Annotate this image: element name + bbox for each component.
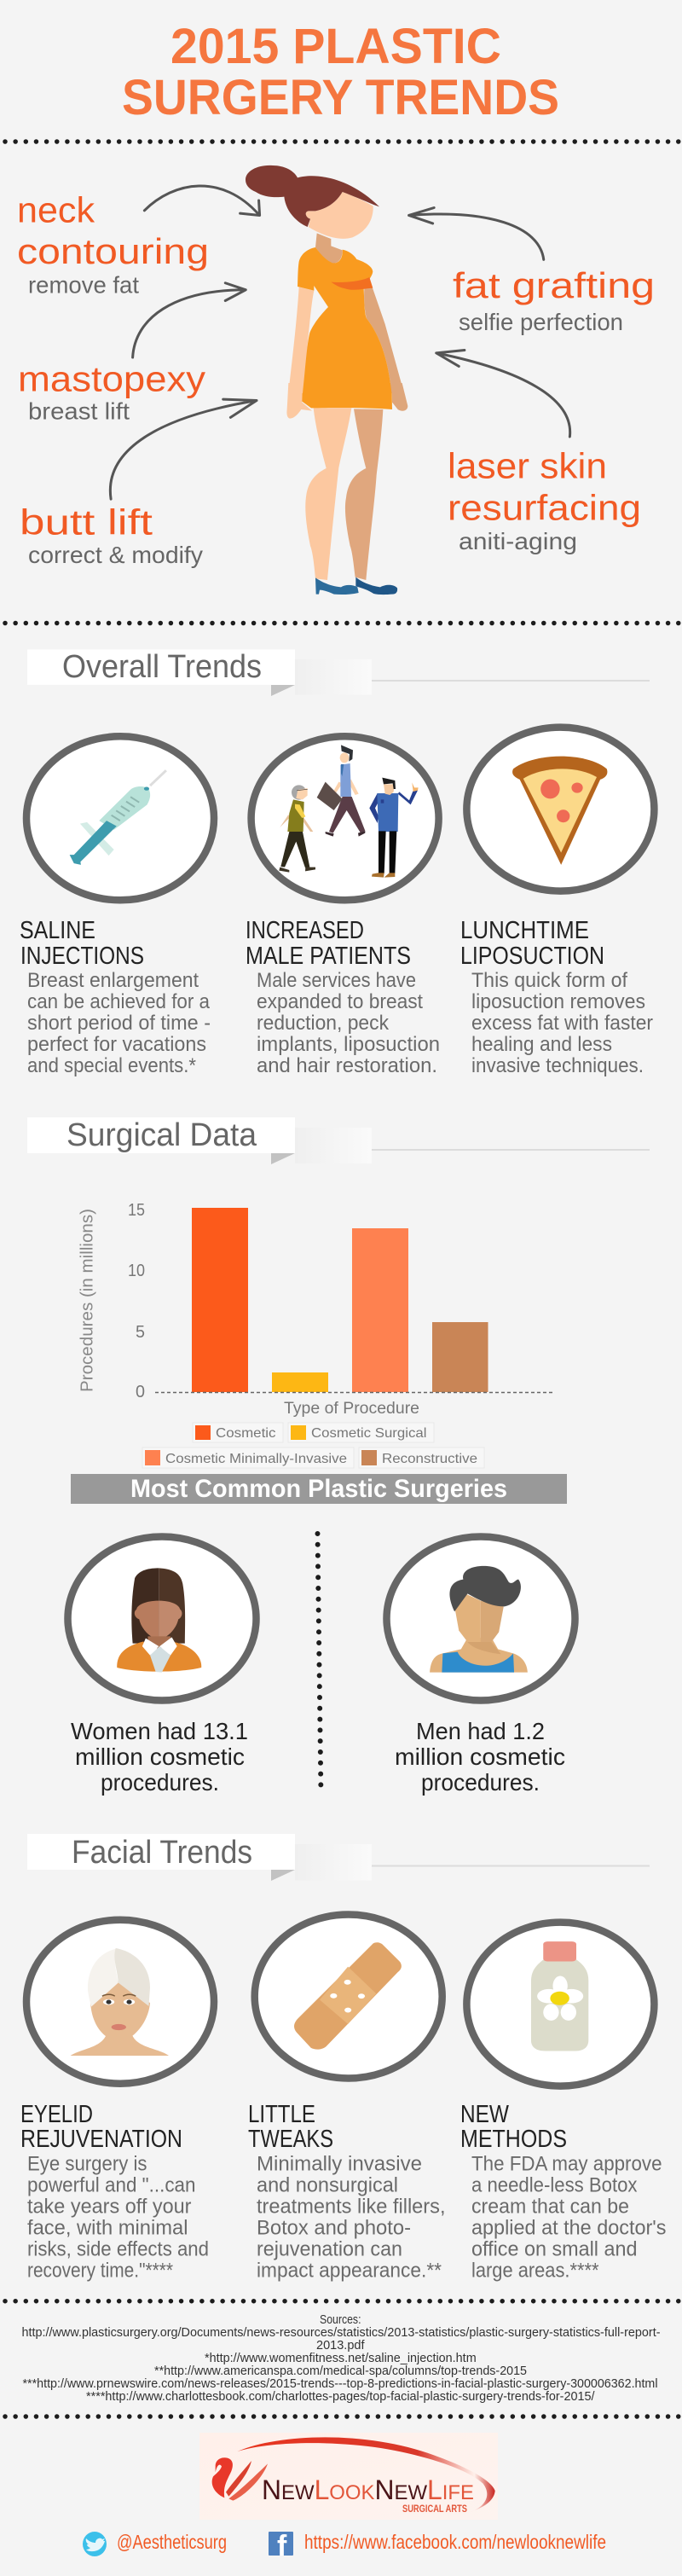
text: new methods description	[471, 2153, 667, 2283]
heading: eyelid rejuvenation: EYELID	[20, 2101, 93, 2128]
legend: Cosmetic Minimally-Invasive	[165, 1452, 347, 1466]
text: sources: 2013.pdf	[316, 2338, 365, 2353]
panel: saline injections	[20, 736, 214, 1077]
text: little tweaks description: impact appearance.**	[257, 2259, 442, 2283]
icon: woman portrait	[68, 1537, 256, 1701]
text: men statistic: procedures.	[421, 1769, 540, 1796]
text: little tweaks description	[257, 2153, 445, 2283]
y axis ticks: 5	[136, 1323, 145, 1342]
banner: most common plastic surgeries: Most Common Plastic Surgeries	[130, 1475, 507, 1503]
text: women statistic: procedures.	[101, 1769, 219, 1796]
label: laser skin resurfacing	[448, 446, 641, 554]
title: SURGERY TRENDS	[122, 70, 559, 125]
panel: men statistic	[387, 1537, 575, 1796]
panel: increased male patients	[246, 736, 440, 1077]
panel: new methods	[460, 1923, 667, 2283]
logo: New Look New Life Surgical Arts: SURGICAL ARTS	[402, 2504, 467, 2515]
legend: Cosmetic Surgical	[311, 1426, 426, 1441]
panel: women statistic	[68, 1537, 256, 1796]
panel: procedures on the figure	[17, 165, 655, 595]
text: little tweaks description: Minimally invasive	[257, 2153, 422, 2175]
text: sources: **http://www.americanspa.com/medical-spa/columns/top-trends-2015	[154, 2364, 527, 2378]
label: mastopexy: mastopexy	[18, 359, 205, 399]
icon: bandage	[255, 1914, 442, 2078]
label: neck contouring: contouring	[17, 231, 209, 271]
text: women statistic: Women had 13.1	[71, 1718, 248, 1744]
text: saline description: short period of time -	[27, 1012, 211, 1035]
label: fat grafting	[453, 265, 655, 335]
heading: Facial Trends: Facial Trends	[72, 1835, 252, 1871]
text: new methods description: a needle-less Botox	[471, 2173, 638, 2197]
text: new methods description: cream that can be	[471, 2196, 629, 2218]
heading: saline injections: INJECTIONS	[20, 943, 144, 970]
text: saline description: can be achieved for a	[27, 990, 211, 1013]
text: liposuction description: liposuction removes	[471, 990, 645, 1013]
text: liposuction description	[471, 969, 653, 1077]
heading: saline injections: SALINE	[20, 917, 95, 944]
icon: woman with towel	[26, 1920, 214, 2084]
panel: eyelid rejuvenation	[20, 1920, 214, 2283]
arrow: butt lift	[110, 399, 257, 499]
text: little tweaks description: Botox and photo-	[257, 2216, 411, 2240]
text: saline description	[27, 969, 211, 1077]
text: men statistic: Men had 1.2	[416, 1718, 545, 1744]
label: laser skin resurfacing: resurfacing	[448, 488, 641, 528]
heading: lunchtime liposuction	[460, 917, 604, 970]
bar chart: procedures by type	[78, 1201, 552, 1468]
y axis ticks: 0	[136, 1383, 145, 1401]
illustration: woman in orange dress	[246, 165, 407, 595]
logo: New Look New Life Surgical Arts	[199, 2433, 498, 2520]
icon: pizza slice	[466, 728, 654, 891]
heading: saline injections	[20, 917, 144, 970]
text: sources	[22, 2312, 660, 2404]
text: men statistic: million cosmetic	[395, 1743, 565, 1770]
text: saline description: Breast enlargement	[27, 969, 199, 992]
text: liposuction description: excess fat with faster	[471, 1012, 653, 1035]
social: facebook	[269, 2530, 606, 2562]
panel: lunchtime liposuction	[460, 728, 654, 1077]
text: eyelid description: risks, side effects and	[27, 2238, 209, 2260]
text: new methods description: applied at the doctor's	[471, 2216, 667, 2240]
arrow: mastopexy	[133, 283, 246, 357]
icon: twitter bird	[83, 2532, 107, 2556]
heading: little tweaks: TWEAKS	[248, 2126, 333, 2153]
icon: facebook f: f	[277, 2530, 287, 2562]
text: women statistic: million cosmetic	[75, 1743, 245, 1770]
heading: increased male patients: INCREASED	[246, 917, 364, 944]
text: little tweaks description: treatments like fillers,	[257, 2196, 445, 2218]
legend: Reconstructive	[382, 1452, 477, 1466]
label: neck contouring: neck	[17, 189, 95, 230]
heading: increased male patients: MALE PATIENTS	[246, 943, 411, 970]
text: eyelid description: Eye surgery is	[27, 2153, 147, 2175]
y axis ticks: 15	[128, 1201, 145, 1220]
label: neck contouring	[17, 189, 209, 299]
heading: Surgical Data: Surgical Data	[66, 1117, 257, 1153]
text: sources: ***http://www.prnewswire.com/news-releases/2015-trends---top-8-predictions-in-facial-plastic-surgery-300006362.html	[22, 2376, 658, 2391]
label: laser skin resurfacing: laser skin	[448, 446, 607, 486]
label: mastopexy: breast lift	[28, 398, 130, 425]
legend: Cosmetic	[216, 1426, 276, 1441]
text: male patients description: reduction, peck	[257, 1012, 390, 1035]
text: little tweaks description: rejuvenation can	[257, 2238, 402, 2260]
text: saline description: perfect for vacations	[27, 1033, 206, 1056]
label: laser skin resurfacing: aniti-aging	[459, 528, 577, 554]
icon: man portrait	[387, 1537, 575, 1701]
heading: new methods	[460, 2101, 567, 2153]
heading: Surgical Data	[27, 1117, 650, 1164]
heading: increased male patients	[246, 917, 411, 970]
icon: cream bottle with flower	[466, 1923, 654, 2086]
heading: Facial Trends	[27, 1834, 650, 1881]
text: new methods description: office on small and	[471, 2238, 638, 2260]
heading: Overall Trends	[27, 649, 650, 696]
text: male patients description: and hair restoration.	[257, 1054, 437, 1077]
legend	[142, 1423, 484, 1468]
text: sources: ****http://www.charlottesbook.com/charlottes-pages/top-facial-plastic-surgery-trends-for-2015/	[86, 2389, 595, 2404]
label: fat grafting: selfie perfection	[459, 309, 623, 335]
social: twitter: @Aestheticsurg	[117, 2531, 227, 2553]
heading: little tweaks: LITTLE	[248, 2101, 315, 2128]
text: new methods description: large areas.****	[471, 2259, 598, 2283]
text: liposuction description: This quick form of	[471, 969, 627, 992]
text: eyelid description: powerful and "...can	[27, 2173, 196, 2197]
text: eyelid description: recovery time."****	[27, 2259, 173, 2283]
text: sources: *http://www.womenfitness.net/saline_injection.htm	[205, 2351, 477, 2365]
text: male patients description: expanded to breast	[257, 990, 423, 1013]
text: male patients description	[257, 969, 440, 1077]
text: little tweaks description: and nonsurgical	[257, 2173, 398, 2197]
bars	[192, 1208, 488, 1392]
heading: lunchtime liposuction: LUNCHTIME	[460, 917, 589, 944]
text: eyelid description: take years off your	[27, 2196, 191, 2218]
heading: eyelid rejuvenation	[20, 2101, 182, 2153]
text: women statistic	[71, 1718, 248, 1796]
label: butt lift: correct & modify	[28, 542, 203, 568]
label: butt lift: butt lift	[20, 502, 153, 542]
label: fat grafting: fat grafting	[453, 265, 655, 305]
y axis title: Procedures (in millions)	[78, 1209, 97, 1392]
icon: facebook f	[269, 2530, 293, 2562]
panel: little tweaks	[248, 1914, 445, 2283]
label: butt lift	[20, 502, 203, 568]
y axis ticks: 10	[128, 1262, 145, 1280]
social: facebook: https://www.facebook.com/newlooknewlife	[304, 2531, 606, 2553]
heading: little tweaks	[248, 2101, 333, 2153]
arrow: neck	[144, 186, 260, 215]
label: mastopexy	[18, 359, 205, 425]
arrow: laser skin resurfacing	[436, 351, 570, 437]
text: eyelid description: face, with minimal	[27, 2216, 188, 2240]
y axis ticks	[128, 1201, 145, 1401]
text: male patients description: implants, liposuction	[257, 1033, 440, 1056]
heading: new methods: METHODS	[460, 2126, 567, 2153]
text: eyelid description	[27, 2153, 209, 2283]
text: male patients description: Male services have	[257, 969, 416, 992]
x axis title: Type of Procedure	[284, 1400, 419, 1418]
text: sources: Sources:	[320, 2312, 361, 2327]
label: neck contouring: remove fat	[28, 271, 139, 299]
arrow: fat grafting	[409, 208, 544, 259]
text: men statistic	[395, 1718, 565, 1796]
heading: lunchtime liposuction: LIPOSUCTION	[460, 943, 604, 970]
social: twitter	[83, 2531, 227, 2556]
logo: New Look New Life Surgical Arts: NEWLOOKNEWLIFE	[262, 2474, 474, 2505]
text: liposuction description: invasive techniques.	[471, 1054, 644, 1077]
heading: Overall Trends: Overall Trends	[62, 649, 262, 685]
icon: syringe	[26, 736, 214, 900]
title: 2015 PLASTIC	[170, 19, 501, 74]
title	[122, 19, 559, 125]
text: sources: http://www.plasticsurgery.org/Documents/news-resources/statistics/2013-statistics/plastic-surgery-statistics-full-report-	[22, 2325, 660, 2340]
icon: three men	[251, 736, 439, 900]
icon: swoosh and swan	[212, 2437, 495, 2512]
heading: eyelid rejuvenation: REJUVENATION	[20, 2126, 182, 2153]
text: new methods description: The FDA may approve	[471, 2153, 662, 2175]
heading: new methods: NEW	[460, 2101, 509, 2128]
text: liposuction description: healing and less	[471, 1033, 612, 1056]
text: saline description: and special events.*	[27, 1054, 196, 1077]
